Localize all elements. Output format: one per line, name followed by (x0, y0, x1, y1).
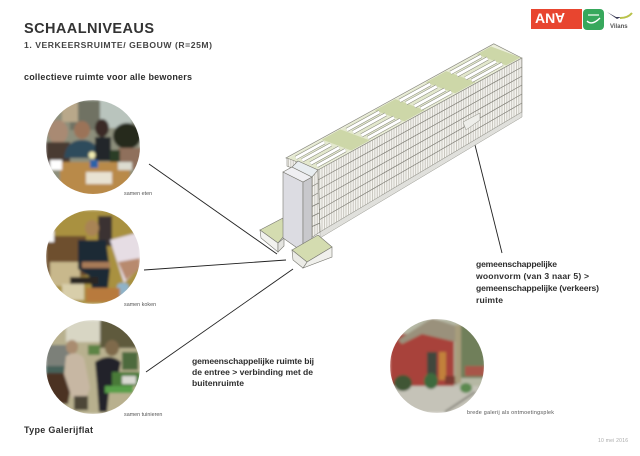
subtitle: 1. VERKEERSRUIMTE/ GEBOUW (R=25M) (24, 40, 212, 50)
text block: woonvorm: gemeenschappelijke (verkeers) (476, 283, 599, 293)
caption: brede galerij: brede galerij als ontmoetingsplek (467, 410, 554, 416)
text block: entree: buitenruimte (192, 378, 244, 388)
text block: woonvorm: woonvorm (van 3 naar 5) > (475, 271, 589, 281)
end wall (287, 158, 320, 238)
floor bands (318, 67, 522, 220)
photo: samen koken (46, 210, 140, 304)
right annex (292, 235, 332, 268)
building (260, 44, 526, 268)
leader lines (144, 133, 502, 372)
tower (283, 161, 318, 252)
text block: entree: gemeenschappelijke ruimte bij (192, 356, 314, 366)
caption: samen koken: samen koken (124, 302, 156, 308)
logo: green (583, 9, 604, 30)
facade (318, 58, 522, 232)
text block: entree (192, 356, 314, 388)
section heading: collectieve ruimte voor alle bewoners (24, 72, 192, 82)
footer label: Type Galerijflat (24, 425, 93, 435)
photo: samen tuinieren (46, 320, 140, 414)
photo: brede galerij (390, 318, 485, 413)
plinth (320, 112, 522, 238)
photo: samen eten (46, 100, 142, 196)
text block: woonvorm (475, 259, 599, 305)
text block: woonvorm: ruimte (476, 295, 503, 305)
logos (531, 9, 632, 30)
caption: samen eten: samen eten (124, 191, 152, 197)
caption: samen tuinieren: samen tuinieren (124, 412, 162, 418)
text block: woonvorm: gemeenschappelijke (476, 259, 557, 269)
title: SCHAALNIVEAUS (24, 21, 154, 37)
date: 10 mei 2016 (598, 438, 628, 444)
logo: ANA (531, 9, 582, 29)
end wall floors (311, 183, 320, 227)
logo: Vilans: Vilans (610, 24, 628, 30)
logo: ANA: AN (535, 10, 555, 26)
facade detail near leader (463, 113, 480, 130)
left annex (260, 218, 284, 252)
logo: ANA: A (555, 10, 565, 26)
text block: entree: de entree > verbinding met de (192, 367, 313, 377)
roof (286, 44, 526, 170)
